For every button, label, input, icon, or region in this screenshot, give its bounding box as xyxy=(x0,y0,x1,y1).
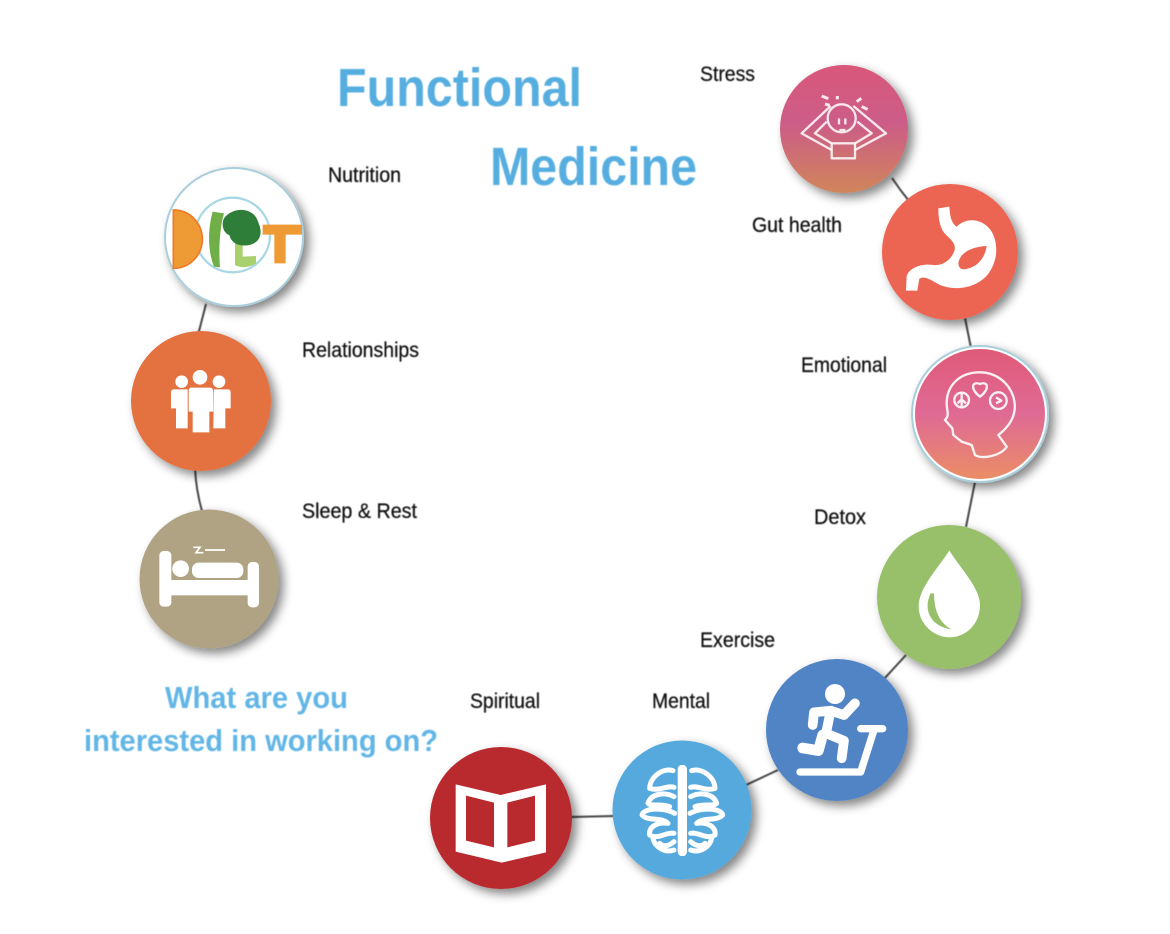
labels: Gut health xyxy=(752,214,842,237)
icon: diet lettering xyxy=(173,198,302,272)
icon: head with emotions xyxy=(945,372,1015,457)
title: Medicine xyxy=(490,137,697,197)
node: sleep and rest xyxy=(140,510,278,648)
icon: treadmill runner xyxy=(800,684,883,772)
leaf xyxy=(958,246,987,269)
labels: Relationships xyxy=(302,339,419,362)
question text: What are you xyxy=(165,680,348,715)
node: emotional xyxy=(912,346,1048,482)
question text xyxy=(84,680,438,758)
node: gut health xyxy=(882,184,1018,320)
question text: interested in working on? xyxy=(84,723,438,758)
labels: Nutrition xyxy=(328,164,401,187)
icon: group of people xyxy=(171,370,231,432)
node: spiritual xyxy=(430,747,572,889)
node: exercise xyxy=(766,659,908,801)
labels: Detox xyxy=(814,506,866,529)
labels xyxy=(302,63,887,713)
icon: open book xyxy=(456,784,546,863)
node: detox xyxy=(877,525,1021,669)
node: nutrition xyxy=(165,168,303,306)
icon: stomach xyxy=(906,207,996,291)
title xyxy=(337,58,697,197)
icon: stressed person xyxy=(802,96,886,158)
labels: Emotional xyxy=(801,354,887,377)
labels: Exercise xyxy=(700,629,775,652)
icon: brain xyxy=(642,769,723,852)
node: relationships xyxy=(131,331,271,471)
icon: bed xyxy=(159,547,259,607)
labels: Mental xyxy=(652,690,710,713)
node: mental xyxy=(612,740,752,880)
title: Functional xyxy=(337,58,582,118)
labels: Stress xyxy=(700,63,755,86)
node: stress xyxy=(780,65,908,193)
labels: Spiritual xyxy=(470,690,540,713)
labels: Sleep & Rest xyxy=(302,500,417,523)
connector lines xyxy=(195,178,975,817)
icon: water drop xyxy=(919,551,980,637)
